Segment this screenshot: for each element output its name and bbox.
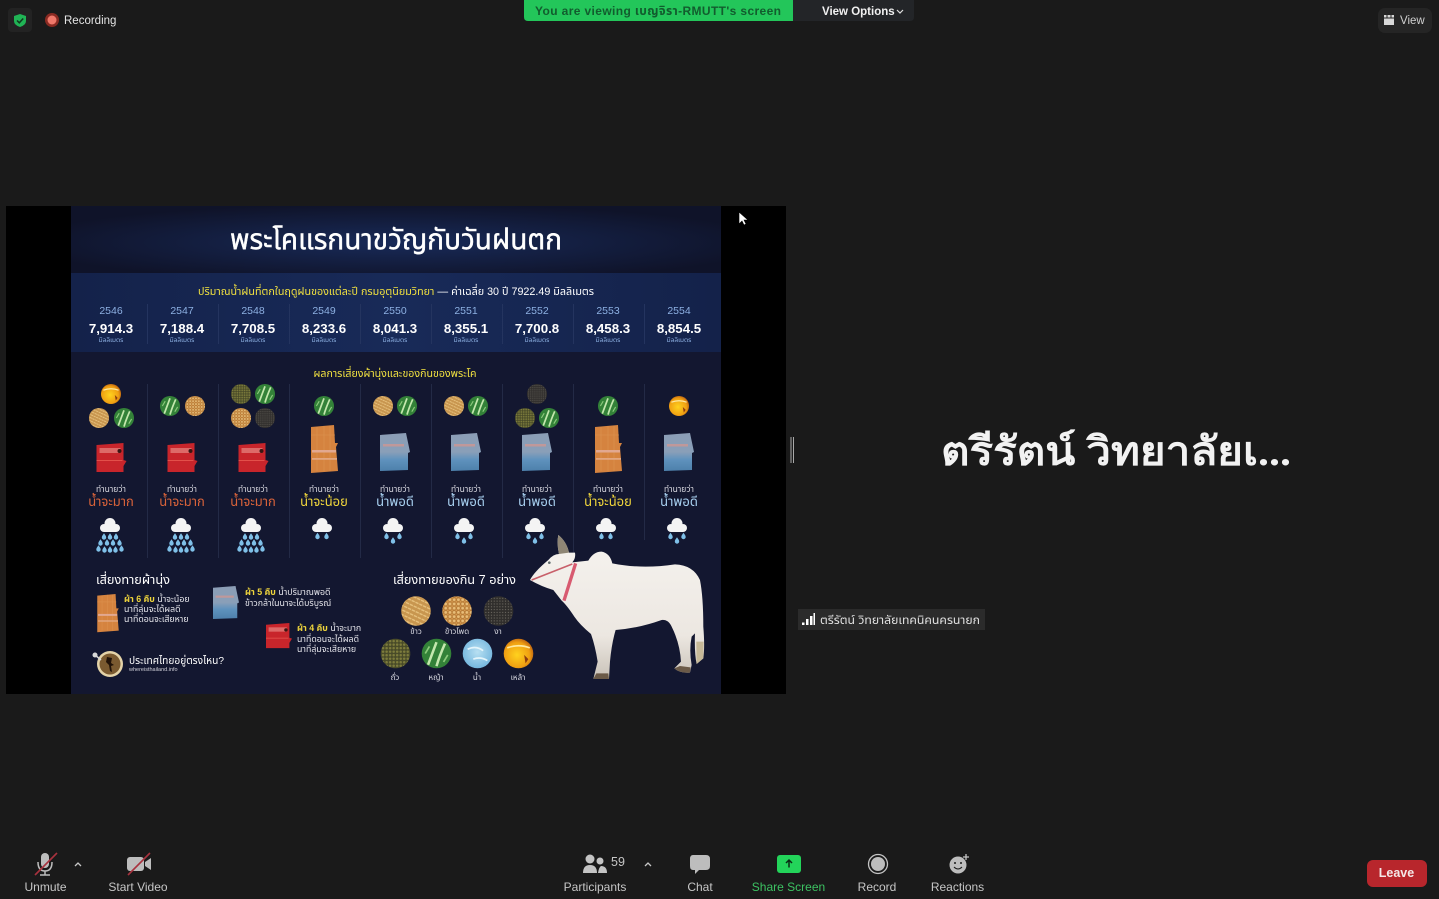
recording indicator (45, 13, 116, 27)
logo: where is thailand: whereisthailand.info (128, 667, 178, 673)
column 2552 (515, 384, 559, 544)
red cloth omen: ผ้า 4 คืบ น้ำจะมาก (297, 622, 361, 633)
year values: มิลลิเมตร (596, 337, 620, 344)
column 2546: ทำนายว่า (96, 484, 126, 494)
food: water: น้ำ (473, 671, 481, 682)
year values: มิลลิเมตร (525, 337, 549, 344)
blue cloth omen (213, 586, 331, 619)
year values: 2551 (454, 305, 478, 317)
column 2547: น้ำจะมาก (159, 492, 205, 509)
unmute button: Unmute (24, 880, 67, 894)
share screen button: Share Screen (752, 880, 825, 894)
year values (89, 305, 702, 344)
orange cloth omen (97, 593, 190, 632)
panel: cloth omens (92, 571, 361, 677)
infographic panel (71, 206, 721, 694)
food: liquor (504, 639, 533, 682)
column 2551: น้ำพอดี (447, 492, 485, 509)
leave button (1367, 860, 1427, 887)
column 2546: น้ำจะมาก (88, 492, 134, 509)
column 2549: ทำนายว่า (309, 484, 339, 494)
share screen button (752, 855, 825, 894)
year values: 2550 (383, 305, 407, 317)
audio options caret (75, 863, 81, 866)
participants caret (645, 863, 651, 866)
panel: food omens (381, 571, 533, 682)
results heading: ผลการเสี่ยงผ้านุ่งและของกินของพระโค (314, 365, 476, 380)
record button (858, 854, 896, 894)
blue cloth omen: ข้าวกล้าในนาจะได้บริบูรณ์ (245, 598, 331, 609)
year values: 8,458.3 (586, 321, 630, 336)
header panel (71, 206, 721, 273)
food: corn (442, 596, 472, 636)
year values: มิลลิเมตร (312, 337, 336, 344)
column 2548: น้ำจะมาก (230, 492, 276, 509)
column 2553 (584, 396, 632, 539)
start video button (108, 853, 168, 894)
illustration: white ox (530, 535, 704, 679)
year values: 2548 (241, 305, 265, 317)
year values: 2553 (596, 305, 620, 317)
view button: View (1400, 15, 1425, 27)
column 2547: ทำนายว่า (167, 484, 197, 494)
start video button: Start Video (108, 880, 168, 894)
year values: 2549 (312, 305, 336, 317)
security shield icon (8, 8, 32, 32)
food: grass: หญ้า (428, 672, 444, 682)
column 2554: น้ำพอดี (660, 492, 698, 509)
panel: rainfall by year (71, 273, 721, 352)
food: corn: ข้าวโพด (445, 626, 469, 636)
year values: 7,700.8 (515, 321, 559, 336)
year values: 7,708.5 (231, 321, 276, 336)
food: beans (381, 639, 410, 682)
title: พระโคแรกนาขวัญกับวันฝนตก (230, 224, 562, 256)
column 2550: ทำนายว่า (380, 484, 410, 494)
screen sharing banner (524, 0, 914, 21)
column 2553: ทำนายว่า (593, 484, 623, 494)
column 2548 (230, 384, 276, 553)
food: water (463, 639, 492, 682)
food: sesame: งา (494, 627, 502, 636)
logo: where is thailand (92, 651, 224, 677)
screen sharing banner: View Options (822, 6, 895, 18)
chat button: Chat (687, 880, 713, 894)
participants button: Participants (564, 880, 626, 894)
column 2546 (88, 384, 134, 553)
red cloth omen (266, 622, 361, 654)
participants button (564, 854, 626, 894)
column 2552: น้ำพอดี (518, 492, 556, 509)
food: rice (401, 596, 431, 636)
food: liquor: เหล้า (511, 672, 525, 682)
chat button (687, 855, 713, 894)
column 2547 (159, 396, 205, 553)
year values: มิลลิเมตร (170, 337, 194, 344)
column 2549: น้ำจะน้อย (300, 492, 348, 509)
year values: 2547 (170, 305, 194, 317)
logo: where is thailand: ประเทศไทยอยู่ตรงไหน? (129, 654, 224, 667)
cloth heading: เสี่ยงทายผ้านุ่ง (96, 571, 170, 587)
record button: Record (858, 880, 896, 894)
orange cloth omen: ผ้า 6 คืบ น้ำจะน้อย (124, 593, 190, 604)
year values: 8,233.6 (302, 321, 346, 336)
mouse cursor (739, 212, 748, 225)
shared screen (6, 206, 786, 694)
year values: 2546 (99, 305, 123, 317)
red cloth omen: นาที่ลุ่มจะเสียหาย (297, 643, 356, 654)
participant name tag (798, 609, 985, 630)
red cloth omen: นาที่ดอนจะได้ผลดี (297, 633, 359, 644)
column 2551: ทำนายว่า (451, 484, 481, 494)
food: sesame (484, 596, 513, 636)
orange cloth omen: นาที่ลุ่มจะได้ผลดี (124, 603, 181, 614)
year values: มิลลิเมตร (454, 337, 478, 344)
year values: มิลลิเมตร (667, 337, 691, 344)
rainfall heading: ปริมาณน้ำฝนที่ตกในฤดูฝนของแต่ละปี กรมอุตุนิยมวิทยา — ค่าเฉลี่ย 30 ปี 7922.49 มิลลิเมตร (198, 283, 594, 298)
food: rice: ข้าว (410, 626, 422, 636)
column 2554 (660, 396, 698, 544)
food heading: เสี่ยงทายของกิน 7 อย่าง (393, 571, 516, 587)
food: grass (422, 639, 451, 682)
year values: 2552 (525, 305, 549, 317)
screen sharing banner: You are viewing เบญจิรา-RMUTT's screen (535, 4, 781, 18)
participant name tag: ตรีรัตน์ วิทยาลัยเทคนิคนครนายก (820, 614, 980, 627)
column 2550: น้ำพอดี (376, 492, 414, 509)
column 2551 (444, 396, 488, 544)
year values: 8,355.1 (444, 321, 489, 336)
year values: 7,914.3 (89, 321, 133, 336)
reactions button (931, 854, 984, 894)
splitter handle (791, 437, 794, 463)
year values: มิลลิเมตร (241, 337, 265, 344)
food: beans: ถั่ว (391, 671, 399, 682)
year values: มิลลิเมตร (383, 337, 407, 344)
reactions button: Reactions (931, 880, 984, 894)
column 2552: ทำนายว่า (522, 484, 552, 494)
toolbar (24, 853, 1427, 894)
participants button: 59 (611, 855, 625, 869)
blue cloth omen: ผ้า 5 คืบ น้ำปริมาณพอดี (245, 586, 330, 597)
year values: มิลลิเมตร (99, 337, 123, 344)
participant name large: ตรีรัตน์ วิทยาลัยเ... (941, 429, 1291, 474)
year values: 8,041.3 (373, 321, 417, 336)
view button (1378, 8, 1432, 33)
year values: 7,188.4 (160, 321, 205, 336)
recording indicator: Recording (64, 15, 116, 27)
column 2550 (373, 396, 417, 544)
column 2549 (300, 396, 348, 539)
year values: 8,854.5 (657, 321, 702, 336)
column 2553: น้ำจะน้อย (584, 492, 632, 509)
year values: 2554 (667, 305, 691, 317)
column 2554: ทำนายว่า (664, 484, 694, 494)
unmute button (24, 853, 67, 894)
orange cloth omen: นาที่ดอนจะเสียหาย (124, 613, 189, 624)
column 2548: ทำนายว่า (238, 484, 268, 494)
leave button: Leave (1379, 866, 1414, 880)
